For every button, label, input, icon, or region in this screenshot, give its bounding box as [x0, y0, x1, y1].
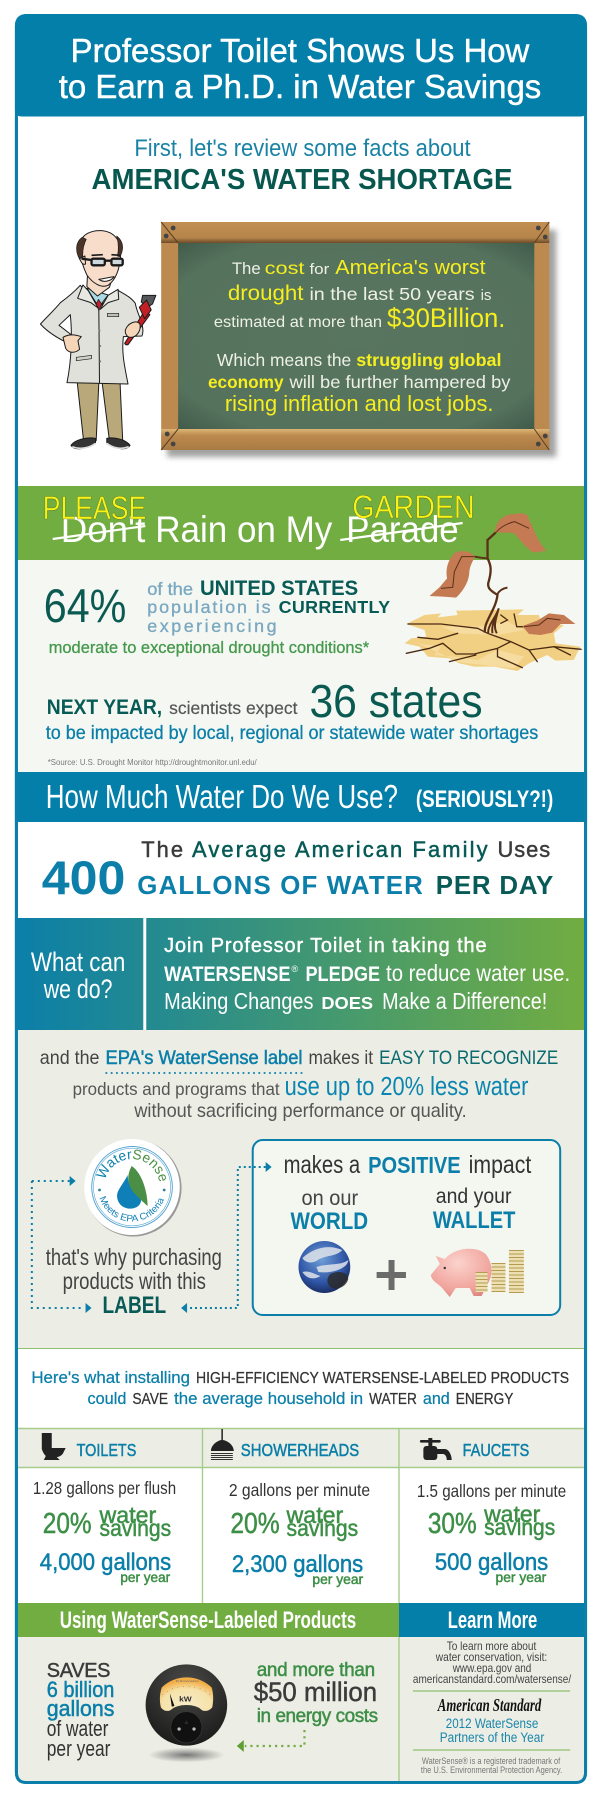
chalkboard text: $30Billion.	[387, 303, 505, 333]
column: showerheads: per year	[312, 1571, 364, 1587]
stat: 64 percent: population is	[147, 597, 271, 617]
column: faucets	[417, 1438, 566, 1585]
text: savings intro: ENERGY	[456, 1391, 514, 1408]
chalkboard text: Which means the	[217, 350, 351, 370]
icon: WaterSense logo	[84, 1139, 182, 1236]
pledge text: to reduce water use.	[386, 960, 570, 986]
column: toilets: 20%	[43, 1508, 92, 1540]
banner: how much water	[15, 772, 587, 822]
pledge text: ®	[292, 964, 299, 974]
chalkboard text: rising inflation and lost jobs.	[225, 391, 494, 416]
source note: *Source: U.S. Drought Monitor http://droughtmonitor.unl.edu/	[48, 757, 257, 767]
impact text: WORLD	[291, 1208, 368, 1235]
illustration: Professor Toilet	[40, 231, 156, 449]
crossed out headline: Don't	[61, 509, 145, 550]
title text: Professor Toilet Shows Us How	[71, 32, 530, 69]
panel: WaterSense label	[18, 1030, 584, 1349]
stat: 64 percent: moderate to exceptional drought conditions*	[49, 639, 370, 657]
text: 50 million: in energy costs	[257, 1706, 378, 1727]
column: showerheads: 2 gallons per minute	[229, 1480, 370, 1500]
heading bar: learn more: Learn More	[448, 1607, 537, 1634]
impact text	[284, 1151, 531, 1235]
text: savings intro: and	[423, 1389, 450, 1408]
text: saves 6 billion gallons: per year	[47, 1736, 110, 1761]
text: 50 million	[254, 1660, 378, 1727]
pledge text	[164, 935, 570, 1014]
replacement words: PLEASE	[43, 490, 146, 526]
column: toilets: per year	[120, 1569, 170, 1585]
intro text: products and programs that	[73, 1079, 280, 1099]
column: toilets: water	[98, 1502, 157, 1528]
crossed out headline	[53, 509, 463, 550]
panel: bottom savings	[18, 1603, 399, 1782]
text: saves 6 billion gallons: of water	[47, 1716, 108, 1741]
icon: plus	[377, 1260, 406, 1290]
column: faucets: water	[483, 1501, 541, 1527]
text: savings intro: could	[88, 1389, 126, 1408]
impact text: WALLET	[433, 1207, 516, 1234]
stat: 64 percent: of the	[147, 579, 193, 599]
trademark note	[421, 1756, 562, 1776]
question: What can	[31, 947, 125, 977]
column: toilets: TOILETS	[77, 1440, 136, 1460]
text: saves 6 billion gallons: gallons	[47, 1696, 114, 1721]
illustration: dying plant on cracked ground	[405, 513, 581, 671]
chalkboard text: is	[481, 287, 492, 304]
text: visit links: www.epa.gov and	[452, 1663, 531, 1675]
icon: kW meter: kW	[179, 1694, 192, 1703]
arrow: dotted from label to impact box	[181, 1167, 238, 1313]
heading: America's water shortage	[92, 135, 512, 196]
pledge text: PLEDGE	[305, 963, 380, 986]
text: visit links	[413, 1641, 572, 1686]
column: showerheads: water	[286, 1502, 344, 1528]
crossed out headline: Parade	[346, 509, 459, 550]
impact box	[239, 1140, 560, 1315]
chalkboard	[161, 222, 556, 457]
text: savings intro: the average household in	[174, 1389, 363, 1408]
chalkboard text: in the last 50 years	[309, 284, 475, 304]
chalkboard text: America's worst	[335, 257, 486, 279]
text: saves 6 billion gallons: SAVES	[47, 1660, 110, 1682]
heading: America's water shortage: First, let's review some facts about	[134, 135, 471, 162]
title banner	[15, 14, 587, 116]
intro text: use up to 20% less water	[285, 1073, 529, 1101]
crossed out headline: Rain on My	[155, 509, 333, 550]
column: faucets: 30%	[428, 1508, 477, 1540]
impact text: impact	[469, 1151, 531, 1179]
icon: toilet	[42, 1433, 66, 1460]
stat: 400 gallons: Average American Family	[192, 837, 488, 862]
text: savings intro: Here's what installing	[31, 1368, 190, 1387]
text: why purchasing: that's why purchasing	[46, 1244, 222, 1270]
stat: 36 states: NEXT YEAR,	[47, 696, 162, 719]
impact text: and your	[436, 1185, 511, 1208]
banner: how much water: How Much Water Do We Use?	[46, 778, 398, 815]
icon: kW meter: Kilowatts	[176, 1679, 200, 1683]
text: savings intro: WATER	[369, 1391, 417, 1408]
icon: globe	[298, 1241, 350, 1293]
trademark note: WaterSense® is a registered trademark of	[422, 1756, 560, 1767]
stat: 400 gallons: 400	[42, 852, 125, 904]
heading bar: learn more	[399, 1603, 584, 1637]
heading bar: using products: Using WaterSense-Labeled Products	[60, 1607, 356, 1634]
stat: 64 percent	[44, 577, 390, 657]
stat: 400 gallons: GALLONS OF WATER	[137, 872, 423, 900]
title text: to Earn a Ph.D. in Water Savings	[59, 68, 541, 105]
stat: 36 states	[46, 675, 539, 744]
text: visit links: americanstandard.com/watersense/	[413, 1674, 572, 1686]
arrow: green dotted to meter	[237, 1730, 304, 1752]
wooden frame	[161, 222, 549, 450]
stat: 400 gallons	[42, 837, 553, 904]
column: faucets: FAUCETS	[463, 1440, 529, 1460]
pledge text: WATERSENSE	[164, 963, 291, 986]
title text	[59, 32, 541, 105]
icon: showerhead	[211, 1429, 234, 1460]
panel: drought background	[18, 560, 584, 772]
icon: piggy bank and coins	[431, 1249, 516, 1297]
text: why purchasing	[46, 1244, 222, 1319]
question	[31, 947, 125, 1004]
stat: 36 states: to be impacted by local, regional or statewide water shortages	[46, 722, 539, 744]
intro text: makes it	[308, 1048, 374, 1069]
savings table	[18, 1428, 584, 1603]
stat: 64 percent: CURRENTLY	[279, 597, 390, 617]
stat: 64 percent: experiencing	[147, 616, 277, 636]
chalkboard text: drought	[228, 282, 304, 305]
stat: 400 gallons: PER DAY	[436, 872, 553, 900]
chalkboard text: struggling global	[356, 350, 501, 370]
icon: kW meter	[146, 1664, 227, 1762]
icon: WaterSense logo: WaterSense	[96, 1150, 166, 1182]
intro text: without sacrificing performance or quality.	[133, 1101, 467, 1122]
intro text	[40, 1048, 558, 1122]
impact text: on our	[301, 1187, 358, 1210]
column: showerheads: SHOWERHEADS	[241, 1440, 359, 1460]
text: visit links: water conservation, visit:	[435, 1652, 547, 1664]
panel: learn more	[399, 1603, 584, 1782]
text: saves 6 billion gallons	[47, 1660, 114, 1761]
impact text: makes a	[284, 1151, 360, 1179]
impact text: POSITIVE	[368, 1152, 461, 1178]
column: toilets: savings	[99, 1515, 171, 1541]
column: toilets	[33, 1433, 176, 1585]
column: faucets: per year	[496, 1569, 547, 1585]
column: faucets: savings	[484, 1514, 555, 1540]
American Standard wordmark: American Standard	[437, 1695, 542, 1715]
text: visit links: To learn more about	[447, 1641, 537, 1653]
intro text: EASY TO RECOGNIZE	[379, 1048, 558, 1069]
chalkboard text: estimated at more than	[214, 314, 382, 331]
text: why purchasing: LABEL	[102, 1292, 166, 1319]
banner: what can we do	[15, 918, 584, 1030]
column: showerheads: savings	[287, 1515, 358, 1541]
pledge text: Making Changes	[164, 988, 313, 1014]
banner: how much water: (SERIOUSLY?!)	[416, 786, 553, 813]
heading bar: using products	[18, 1603, 399, 1637]
column: faucets: 1.5 gallons per minute	[417, 1481, 566, 1501]
stat: 36 states: scientists expect	[169, 698, 298, 718]
column: toilets: 1.28 gallons per flush	[33, 1478, 176, 1498]
stat: 36 states: 36 states	[309, 675, 483, 727]
pledge text: DOES	[321, 993, 373, 1013]
replacement words: GARDEN	[352, 489, 475, 525]
stat: 400 gallons: The	[141, 837, 183, 862]
heading: America's water shortage: AMERICA'S WATER SHORTAGE	[92, 164, 512, 196]
chalkboard text	[208, 257, 510, 416]
stat: 64 percent: 64%	[44, 580, 126, 632]
text: 50 million: and more than	[257, 1660, 375, 1681]
pledge text: Make a Difference!	[382, 988, 547, 1014]
text: savings intro: SAVE	[132, 1391, 168, 1408]
banner: rain on my garden	[18, 486, 584, 560]
column: toilets: 4,000 gallons	[40, 1549, 171, 1576]
arrow: dotted to logo	[32, 1176, 92, 1313]
column: faucets: 500 gallons	[435, 1549, 548, 1576]
trademark note: the U.S. Environmental Protection Agency.	[421, 1765, 562, 1776]
partner award text	[440, 1715, 545, 1745]
text: 50 million: $50 million	[254, 1677, 377, 1707]
text: savings intro	[31, 1368, 569, 1408]
intro text: EPA's WaterSense label	[105, 1048, 302, 1069]
icon: faucet	[420, 1438, 452, 1460]
text: why purchasing: products with this	[63, 1268, 206, 1294]
partner award text: 2012 WaterSense	[446, 1715, 538, 1731]
pledge text: Join Professor Toilet in taking the	[164, 935, 487, 957]
stat: 400 gallons: Uses	[497, 837, 550, 862]
text: saves 6 billion gallons: 6 billion	[47, 1677, 114, 1702]
chalkboard text: will be further hampered by	[289, 372, 510, 392]
column: showerheads: 2,300 gallons	[232, 1551, 363, 1578]
question: we do?	[43, 974, 112, 1004]
chalkboard text: cost	[265, 258, 304, 278]
chalkboard text: for	[309, 261, 329, 278]
column: showerheads: 20%	[230, 1508, 280, 1540]
chalkboard text: The	[232, 259, 261, 278]
column: showerheads	[211, 1429, 370, 1587]
replacement words	[43, 489, 475, 526]
intro text: and the	[40, 1048, 100, 1069]
chalkboard text: economy	[208, 372, 284, 392]
partner award text: Partners of the Year	[440, 1729, 545, 1745]
stat: 64 percent: UNITED STATES	[200, 577, 358, 600]
icon: WaterSense logo: Meets EPA Criteria	[100, 1196, 164, 1222]
